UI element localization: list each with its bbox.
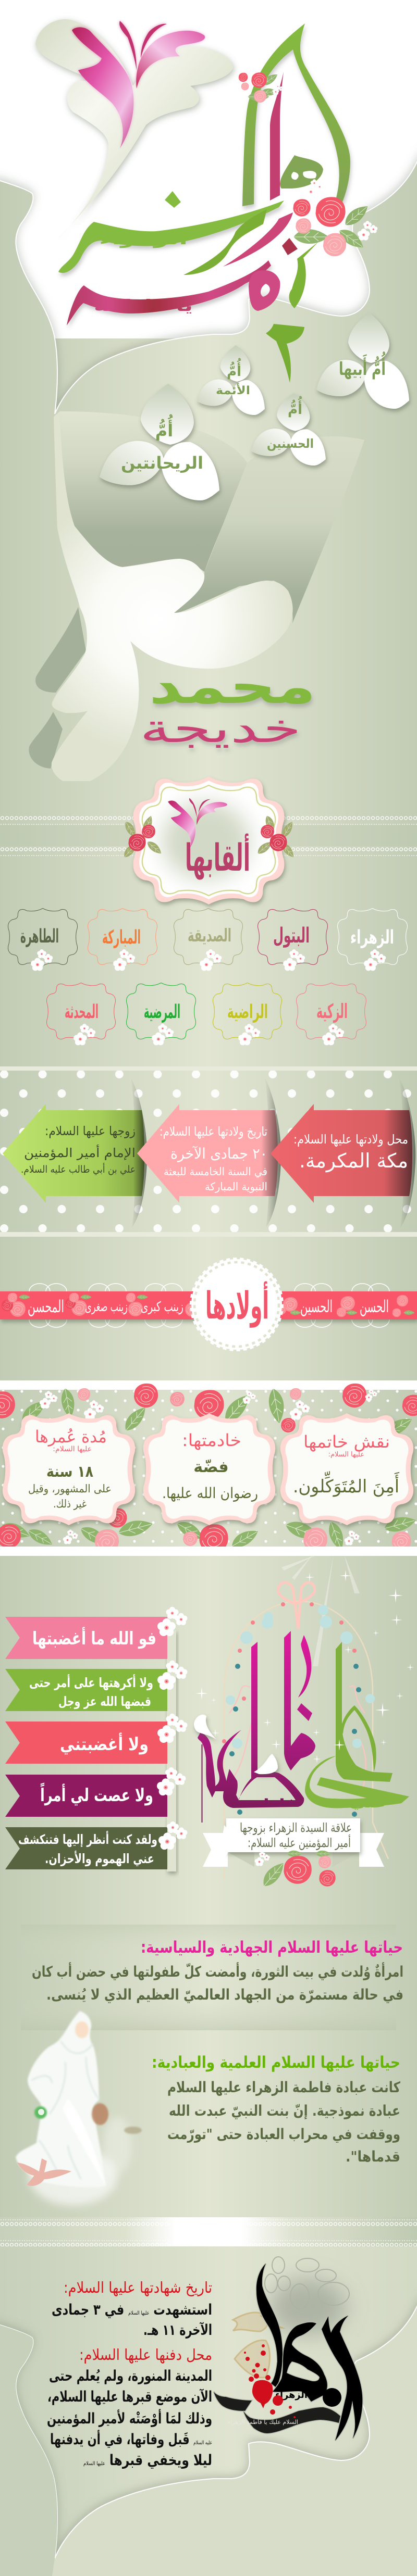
inscription line: السلام عليك يا فاطمة الزهراء (228, 2419, 298, 2426)
badge heading text: ألقابها (185, 833, 250, 880)
section: floral panel with three cards (0, 1380, 417, 1556)
caption ribbon (203, 1818, 384, 1867)
paragraph: burial place: الآن موضع قبرها عليها السلام، (47, 2388, 212, 2405)
page-curl shadow right (399, 1076, 415, 1228)
calligraphy flourish: magenta strokes (198, 1631, 315, 1808)
lower silhouette panel (0, 2295, 417, 2576)
title word: الزهراء: الزهراء (99, 230, 188, 248)
cream flower stem behind the butterfly (35, 19, 233, 241)
paragraph: martyrdom date: استشهدت عليها السلام في ٣ جمادى (52, 2301, 212, 2318)
name: Muhammad: محمد (149, 659, 316, 714)
clover word two: الحسنين (267, 436, 314, 451)
arrow note: في السنة الخامسة للبعثة (164, 1165, 267, 1178)
page-curl shadow left (130, 1076, 147, 1228)
badge butterfly (168, 798, 227, 849)
card: servant (143, 1413, 275, 1525)
sparkles (195, 1570, 414, 1763)
butterfly glow (72, 21, 205, 148)
paragraph: knowledge and worship (167, 2079, 401, 2165)
floral background (0, 1380, 417, 1556)
card note: على المشهور، وقيل (28, 1482, 112, 1495)
banner: nor angered me: ولا أغضبتني (60, 1732, 149, 1755)
paragraph: martyrdom date (52, 2301, 212, 2339)
section: birth and husband arrows (0, 1066, 417, 1237)
banner: when I looked at her: ولقد كنت أنظر إليها فتنكشف (18, 1831, 157, 1848)
title word: يا فاطمة: يا فاطمة (94, 297, 193, 315)
arrow: birthplace (271, 1104, 412, 1203)
arrow: birth date (137, 1104, 278, 1203)
section: titles (0, 776, 417, 1045)
banner: when I looked at her: عني الهموم والأحزان. (45, 1851, 154, 1867)
polka panel (0, 1066, 417, 1237)
card heading: نقش خاتمها (303, 1432, 390, 1452)
paragraph: jihad and politics (32, 1962, 403, 2003)
name: Khadija: خديجة (140, 705, 301, 751)
gold flecks (260, 2312, 286, 2329)
bouquet: upper small (239, 71, 284, 103)
lace band (0, 815, 417, 857)
clover word one: أُمُّ (288, 396, 302, 418)
calligraphy flourish: green teardrop stroke (242, 23, 350, 206)
banner: nor compelled her: ولا أكرهتها على أمر حتى (29, 1674, 153, 1691)
arrow value: الإمام أمير المؤمنين (24, 1145, 136, 1160)
card: age (3, 1413, 135, 1525)
flourish: black ring (273, 2322, 327, 2402)
calligraphy word: فاطمة: فاطمة (240, 1797, 297, 1810)
calligraphy word: علي: علي (349, 1799, 386, 1810)
bright streak (63, 2099, 106, 2185)
white sky area (0, 0, 417, 338)
paragraph: burial place: ليلا ويخفي قبرها عليها السلام (83, 2452, 212, 2469)
title frame: الراضية: الراضية (227, 1001, 268, 1023)
child name: الحسين: الحسين (300, 1297, 333, 1316)
flourish: dark inscribed sweep lower (243, 2407, 340, 2433)
sage silhouette panel (0, 152, 417, 414)
card heading: خادمتها: (182, 1430, 241, 1450)
paragraph: martyrdom date: الآخرة ١١ هـ. (143, 2321, 212, 2339)
banner: nor disobeyed me (5, 1767, 186, 1817)
calligraphy flourish: green bowl and bar (305, 1756, 409, 1808)
calligraphy flourish: green long sweep (58, 200, 284, 273)
banner: nor compelled her (5, 1661, 187, 1711)
title frame: البتول: البتول (273, 924, 310, 948)
calligraphy flourish: pink crescent (223, 212, 293, 267)
medallion heading: أولادها (205, 1281, 269, 1328)
clover word two: الأئمة (216, 383, 250, 397)
black calligraphy artwork (214, 2257, 362, 2441)
banner: when I looked at her (5, 1821, 187, 1869)
caption line two: أمير المؤمنين عليه السلام: (248, 1834, 351, 1850)
paragraph: burial place: وذلك لمَا أوْصَتْه لأمير المؤمنين (47, 2409, 212, 2427)
clover: mother of the two basils (100, 384, 219, 500)
card sub-label: عليها السلام: (53, 1445, 92, 1453)
heading badge (121, 776, 297, 904)
paragraph: burial place (47, 2367, 212, 2469)
veil glow at hem (29, 2148, 117, 2205)
title frame: الصديقة: الصديقة (188, 925, 231, 946)
paragraph: burial place: عليه السلام قَبل وفاتها، في أن يدفنها (50, 2430, 212, 2448)
calligraphy flourish: green lower stroke (183, 209, 267, 275)
ribbon curls (29, 1284, 389, 1327)
calligraphy flourish: green knot (280, 155, 323, 189)
arrow note: النبوية المباركة (205, 1180, 267, 1193)
trailing glow (103, 2117, 132, 2174)
bow (278, 1582, 315, 1629)
section: lace divider with white glow (0, 2217, 417, 2247)
heading: burial place: محل دفنها عليها السلام: (79, 2346, 212, 2364)
card value: فضّة (193, 1458, 229, 1476)
title frame: المباركة (88, 909, 157, 971)
ribbon roses (2, 1293, 415, 1317)
gold swirls (233, 2313, 270, 2378)
arrow: husband (3, 1104, 144, 1203)
title frame: المحدثة (47, 983, 115, 1045)
arch with small floral ornaments (222, 1601, 388, 1880)
banner: nor disobeyed me: ولا عصت لي أمراً (40, 1782, 153, 1806)
card value: ١٨ سنة (46, 1463, 93, 1481)
calligraphy flourish: thin drip (201, 1744, 202, 1823)
title frame: الزهراء: الزهراء (350, 927, 394, 948)
arrow label: زوجها عليها السلام: (45, 1124, 136, 1138)
inscription word: الزهراء (275, 2390, 308, 2401)
banner: nor angered me (5, 1714, 187, 1764)
clover text: أُمُّ أَبيها (339, 351, 386, 380)
calligraphy flourish: crimson diamond (282, 238, 298, 255)
smoke (268, 2278, 347, 2335)
green posy (34, 2106, 47, 2119)
face (75, 2021, 89, 2038)
title frame: المباركة: المباركة (102, 927, 141, 948)
title frame: الزهراء (338, 909, 407, 971)
clover word one: أُمُّ (155, 414, 173, 441)
ribbon bar (0, 1291, 417, 1320)
section: martyrdom and burial (0, 2246, 417, 2576)
title frame: المحدثة: المحدثة (65, 1001, 99, 1023)
clover word one: أُمُّ (227, 358, 241, 380)
butterfly emblem (72, 21, 205, 148)
bouquet: large (293, 179, 377, 256)
section: children ribbon (0, 1259, 417, 1350)
card: ring inscription (280, 1413, 413, 1525)
card value: أَمِنَ المُتَوَكِّلون. (293, 1472, 400, 1497)
arrow note: علي بن أبي طالب عليه السلام. (21, 1163, 136, 1175)
right roses (255, 814, 297, 860)
clover word two: الريحانتين (121, 453, 203, 473)
dark fabric fold left (60, 411, 247, 572)
paragraph: burial place: المدينة المنورة، ولم يُعلم حتى (49, 2367, 212, 2384)
title frame: الصديقة (174, 909, 242, 971)
robe (16, 2011, 106, 2188)
clover: mother of the imams (197, 345, 265, 415)
flourish: black dot (323, 2388, 341, 2407)
card sub-label: عليها السلام: (328, 1451, 364, 1459)
page-curl shadow middle (264, 1076, 281, 1228)
painted butterfly (92, 2103, 108, 2125)
bird (17, 2158, 71, 2186)
veiled figure illustration (16, 2011, 142, 2205)
arrow value: ٢٠ جمادى الآخرة (170, 1145, 267, 1162)
dark fabric lowest left (29, 712, 63, 769)
title frame: الطاهرة: الطاهرة (20, 926, 59, 947)
bouquet under caption (255, 1851, 336, 1890)
dark fabric lower left (35, 607, 86, 693)
calligraphy flourish: green upright (336, 1642, 393, 1782)
calligraphy flourish: green hook (266, 324, 304, 383)
white posy petals (38, 2109, 44, 2115)
dark fabric fold right (174, 436, 364, 623)
flourish: dark inscribed sweep left (214, 2392, 252, 2411)
title frame: الزكية (297, 983, 366, 1045)
arrow value: مكة المكرمة. (299, 1149, 408, 1173)
light rays (281, 1554, 360, 1666)
arrow label: تاريخ ولادتها عليها السلام: (160, 1124, 267, 1139)
card heading: مُدة عُمرها (35, 1427, 107, 1447)
heading: martyrdom date: تاريخ شهادتها عليها السلام: (64, 2279, 212, 2296)
calligraphy flourish: pink long sweep (67, 260, 271, 325)
section: her life (16, 1925, 403, 2205)
interior panel (0, 2246, 417, 2576)
child name: الحسن: الحسن (360, 1297, 389, 1316)
blood splash (244, 2344, 296, 2418)
banner: by God I never angered her: فو الله ما أغضبتها (32, 1627, 156, 1649)
trailing petal (124, 2127, 142, 2134)
banner: nor compelled her: قبضها الله عز وجل (58, 1694, 151, 1710)
shaded band (21, 1925, 396, 2030)
vertical post (167, 1630, 176, 1871)
calligraphy flourish: green diacritic (165, 191, 181, 208)
calligraphy flourish: pink upright stroke (270, 72, 284, 200)
section: hero with title calligraphy (0, 0, 417, 812)
title frame: الطاهرة (8, 909, 77, 971)
card note: رضوان الله عليها. (162, 1485, 258, 1502)
title frame: البتول (258, 909, 327, 971)
left side panel tint (0, 2325, 57, 2576)
child name: زينب كبرى: زينب كبرى (141, 1299, 183, 1315)
title frame: الزكية: الزكية (316, 1000, 348, 1023)
paisley outlines (265, 2257, 349, 2309)
child name: زينب صغرى: زينب صغرى (85, 1299, 128, 1315)
caption line one: علاقة السيدة الزهراء بزوجها (240, 1820, 352, 1835)
calligraphy flourish: green leaf loop (340, 1705, 376, 1772)
title frame: المرضية (127, 983, 195, 1045)
calligraphy flourish: green lower-right stroke (289, 242, 318, 308)
title frame: المرضية: المرضية (144, 1001, 180, 1023)
calligraphy flourish: pink bowl (249, 270, 280, 311)
section: Ali and Fatima relationship (5, 1554, 414, 1890)
clover: mother of her father (316, 313, 409, 409)
child name: المحسن: المحسن (28, 1297, 64, 1316)
clover: mother of hasanayn (251, 393, 326, 466)
card note: غير ذلك. (53, 1498, 87, 1510)
flourish: black spikes (256, 2264, 283, 2387)
left roses (121, 814, 164, 860)
white hand shape (52, 411, 293, 783)
heading medallion (191, 1259, 282, 1350)
white birds (194, 1715, 278, 1774)
title frame: الراضية (213, 983, 281, 1045)
paragraph: knowledge and worship: قدماها". (346, 2148, 400, 2165)
robe folds (31, 2041, 99, 2179)
banner: by God I never angered her (5, 1607, 187, 1659)
